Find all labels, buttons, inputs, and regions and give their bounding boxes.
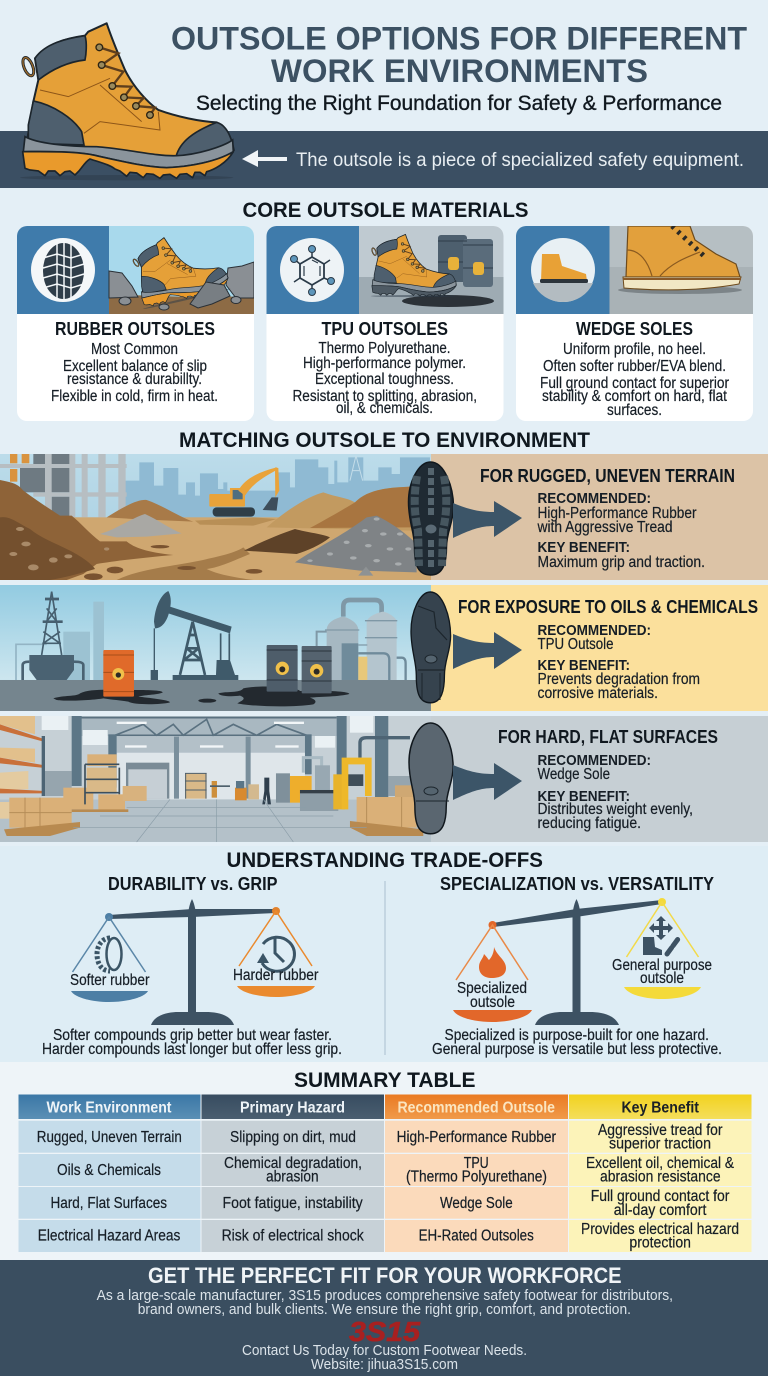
panel: tpu outsoles	[266, 226, 504, 421]
info panel yellow	[431, 585, 768, 711]
table row: rugged: superior traction	[609, 1136, 711, 1153]
table row: electrical	[38, 1221, 739, 1252]
specialization caption: General purpose is versatile but less protective.	[432, 1041, 722, 1058]
arrow	[453, 763, 522, 800]
panel: oils and chemicals row	[0, 585, 768, 711]
table row: oils: abrasion	[266, 1169, 319, 1186]
arrow	[453, 501, 522, 538]
flat text: Wedge Sole	[538, 766, 610, 783]
footer body: brand owners, and bulk clients. We ensure the right grip, comfort, and protection.	[138, 1301, 631, 1318]
panel: hard flat surfaces row	[0, 716, 768, 842]
oil refinery scene	[0, 585, 431, 711]
rugged text	[480, 466, 735, 571]
panel: footer call to action	[0, 1260, 768, 1376]
icon: flame	[479, 947, 506, 978]
table header: Primary Hazard	[240, 1100, 345, 1117]
icon: clock	[257, 937, 294, 971]
balance scale: specialization vs versatility	[453, 898, 712, 1025]
info panel tan	[431, 454, 768, 580]
flat text: reducing fatigue.	[538, 815, 641, 832]
tpu text: High-performance polymer.	[303, 355, 466, 372]
header panel	[0, 20, 768, 188]
scale labels	[457, 980, 527, 1011]
wedge text: stability & comfort on hard, flat	[542, 388, 728, 405]
wedge text: surfaces.	[607, 402, 662, 419]
shelves left	[0, 716, 45, 819]
heading: summary table: SUMMARY TABLE	[294, 1068, 476, 1092]
flat text: Distributes weight evenly,	[538, 801, 693, 818]
flat text	[498, 727, 718, 832]
wedge text	[540, 319, 729, 419]
flat text: RECOMMENDED:	[538, 752, 651, 769]
wedge text: Uniform profile, no heel.	[563, 341, 706, 358]
rugged text: High-Performance Rubber	[538, 505, 696, 522]
tpu image	[266, 226, 504, 314]
oils text: Prevents degradation from	[538, 671, 700, 688]
oils text: corrosive materials.	[538, 685, 658, 702]
band statement: The outsole is a piece of specialized safety equipment.	[296, 149, 744, 171]
icon: derrick	[23, 592, 83, 680]
icon: pumpjack	[151, 591, 238, 680]
rubber text: Excellent balance of slip	[63, 358, 207, 375]
info panel grey	[431, 716, 768, 842]
arrow pointing to boot	[242, 150, 287, 167]
rugged text: KEY BENEFIT:	[538, 539, 630, 556]
panel: rubber outsoles	[17, 226, 254, 421]
table row: hard surfaces: Hard, Flat Surfaces	[50, 1195, 167, 1212]
footer heading: GET THE PERFECT FIT FOR YOUR WORKFORCE	[148, 1263, 622, 1288]
icon: molecule	[280, 238, 344, 302]
icon: move arrows	[649, 916, 673, 940]
table row: hard surfaces: Full ground contact for	[591, 1188, 729, 1205]
rubber text: RUBBER OUTSOLES	[55, 319, 215, 339]
panel: trade-offs	[0, 846, 768, 1062]
table row: rugged: Aggressive tread for	[598, 1122, 722, 1139]
icon: dark barrels	[267, 645, 332, 693]
table header	[18, 1094, 752, 1119]
panel: wedge soles	[516, 226, 754, 421]
subheading: specialization vs versatility: SPECIALIZATION vs. VERSATILITY	[440, 874, 714, 894]
table row: hard surfaces: all-day comfort	[614, 1202, 707, 1219]
oils text: TPU Outsole	[538, 636, 614, 653]
footer body: As a large-scale manufacturer, 3S15 produces comprehensive safety footwear for distributors,	[97, 1287, 673, 1304]
heading: matching outsole to environment: MATCHING OUTSOLE TO ENVIRONMENT	[179, 428, 590, 452]
contact details	[242, 1342, 527, 1373]
icon: chain link	[667, 939, 678, 954]
flat text: FOR HARD, FLAT SURFACES	[498, 727, 718, 747]
rubber text: Flexible in cold, firm in heat.	[51, 388, 218, 405]
table row: oils: TPU	[464, 1155, 489, 1172]
wedge text: WEDGE SOLES	[576, 319, 693, 339]
scale labels	[612, 957, 712, 987]
tpu text: TPU OUTSOLES	[322, 319, 448, 339]
specialization caption	[432, 1027, 722, 1058]
table row: electrical: protection	[629, 1235, 691, 1252]
oils text: KEY BENEFIT:	[538, 657, 630, 674]
scale labels: General purpose	[612, 957, 712, 974]
tpu text	[292, 319, 477, 417]
table row: rugged: Rugged, Uneven Terrain	[37, 1129, 182, 1146]
scale labels: Harder rubber	[233, 967, 318, 984]
header dark band	[0, 131, 768, 188]
icon: tire	[97, 938, 122, 971]
arrow	[453, 632, 522, 669]
subheading: durability vs grip: DURABILITY vs. GRIP	[108, 874, 278, 894]
table header: Work Environment	[46, 1100, 172, 1117]
balance scale: durability vs grip	[70, 899, 318, 1025]
icon: treaded sole	[408, 462, 454, 575]
wedge image	[516, 226, 754, 314]
scale labels: Specialized	[457, 980, 527, 997]
table row: hard surfaces: Wedge Sole	[440, 1195, 513, 1212]
construction site scene	[0, 454, 440, 580]
flat text: KEY BENEFIT:	[538, 788, 630, 805]
table row: oils: abrasion resistance	[600, 1169, 721, 1186]
table row: oils: Excellent oil, chemical &	[586, 1155, 735, 1172]
machinery	[276, 738, 410, 811]
durability caption	[42, 1027, 342, 1058]
title: WORK ENVIRONMENTS	[271, 53, 648, 89]
panel: summary table	[0, 1062, 768, 1260]
table row: oils: Oils & Chemicals	[57, 1162, 161, 1179]
rubber text: Most Common	[91, 341, 178, 358]
durability caption: Softer compounds grip better but wear faster.	[53, 1027, 332, 1044]
table row: electrical: Electrical Hazard Areas	[38, 1228, 181, 1245]
warehouse scene	[0, 716, 431, 842]
wedge text: Full ground contact for superior	[540, 375, 729, 392]
table row: rugged: High-Performance Rubber	[397, 1129, 556, 1146]
contact details: Website: jihua3S15.com	[311, 1356, 458, 1373]
oils text: RECOMMENDED:	[538, 622, 651, 639]
icon: smooth sole	[411, 592, 451, 703]
heading: core outsole materials: CORE OUTSOLE MATERIALS	[242, 198, 528, 222]
table row: electrical: Provides electrical hazard	[581, 1221, 739, 1238]
rugged text: Maximum grip and traction.	[538, 554, 705, 571]
tpu text: oil, & chemicals.	[336, 400, 433, 417]
rugged text: FOR RUGGED, UNEVEN TERRAIN	[480, 466, 735, 486]
boxes right	[350, 785, 423, 836]
icon: orange barrel	[103, 650, 134, 697]
logo: 3S15	[349, 1316, 420, 1347]
table row: electrical: EH-Rated Outsoles	[419, 1228, 534, 1245]
table row: oils: Chemical degradation,	[224, 1155, 362, 1172]
rubber text: resistance & durabillty.	[67, 371, 202, 388]
icon: small boot	[643, 937, 662, 955]
rugged text: RECOMMENDED:	[538, 490, 651, 507]
tanks and pipes	[317, 600, 406, 680]
scale labels: outsole	[470, 994, 515, 1011]
icon: tire tread	[31, 238, 95, 302]
tpu text: Thermo Polyurethane.	[318, 340, 450, 357]
table row: hard surfaces: Foot fatigue, instability	[222, 1195, 363, 1212]
table row: oils: (Thermo Polyurethane)	[406, 1169, 547, 1186]
footer body	[97, 1287, 673, 1318]
table row: hard surfaces	[50, 1188, 729, 1219]
title: OUTSOLE OPTIONS FOR DIFFERENT	[171, 20, 747, 56]
specialization caption: Specialized is purpose-built for one hazard.	[444, 1027, 709, 1044]
icon: excavator	[209, 467, 279, 517]
table header: Key Benefit	[622, 1100, 699, 1117]
rubber text	[51, 319, 218, 405]
subtitle: Selecting the Right Foundation for Safety & Performance	[196, 91, 722, 115]
heading: understanding trade-offs: UNDERSTANDING TRADE-OFFS	[226, 848, 543, 872]
oils text	[458, 597, 758, 702]
contact details: Contact Us Today for Custom Footwear Needs.	[242, 1342, 527, 1359]
durability caption: Harder compounds last longer but offer less grip.	[42, 1041, 342, 1058]
title	[171, 20, 747, 89]
oil puddles	[53, 687, 349, 706]
rugged text: with Aggressive Tread	[537, 519, 672, 536]
table row: rugged	[37, 1122, 723, 1153]
box stacks	[4, 754, 207, 836]
icon: work boot	[20, 23, 234, 180]
icon: mini boot	[531, 238, 595, 302]
panel: rugged terrain row	[0, 454, 768, 580]
table row: electrical: Risk of electrical shock	[222, 1228, 364, 1245]
table cells	[18, 1121, 752, 1252]
wedge text: Often softer rubber/EVA blend.	[543, 358, 726, 375]
scale labels: Softer rubber	[70, 972, 150, 989]
table row: oils	[57, 1155, 735, 1186]
tpu text: Exceptional toughness.	[315, 371, 454, 388]
rubber image	[17, 226, 254, 314]
table row: rugged: Slipping on dirt, mud	[230, 1129, 356, 1146]
tpu text: Resistant to splitting, abrasion,	[292, 388, 477, 405]
table header: Recommended Outsole	[398, 1100, 555, 1117]
icon: workers	[210, 778, 271, 804]
icon: flat sole	[409, 723, 453, 834]
scale labels: outsole	[640, 970, 684, 987]
